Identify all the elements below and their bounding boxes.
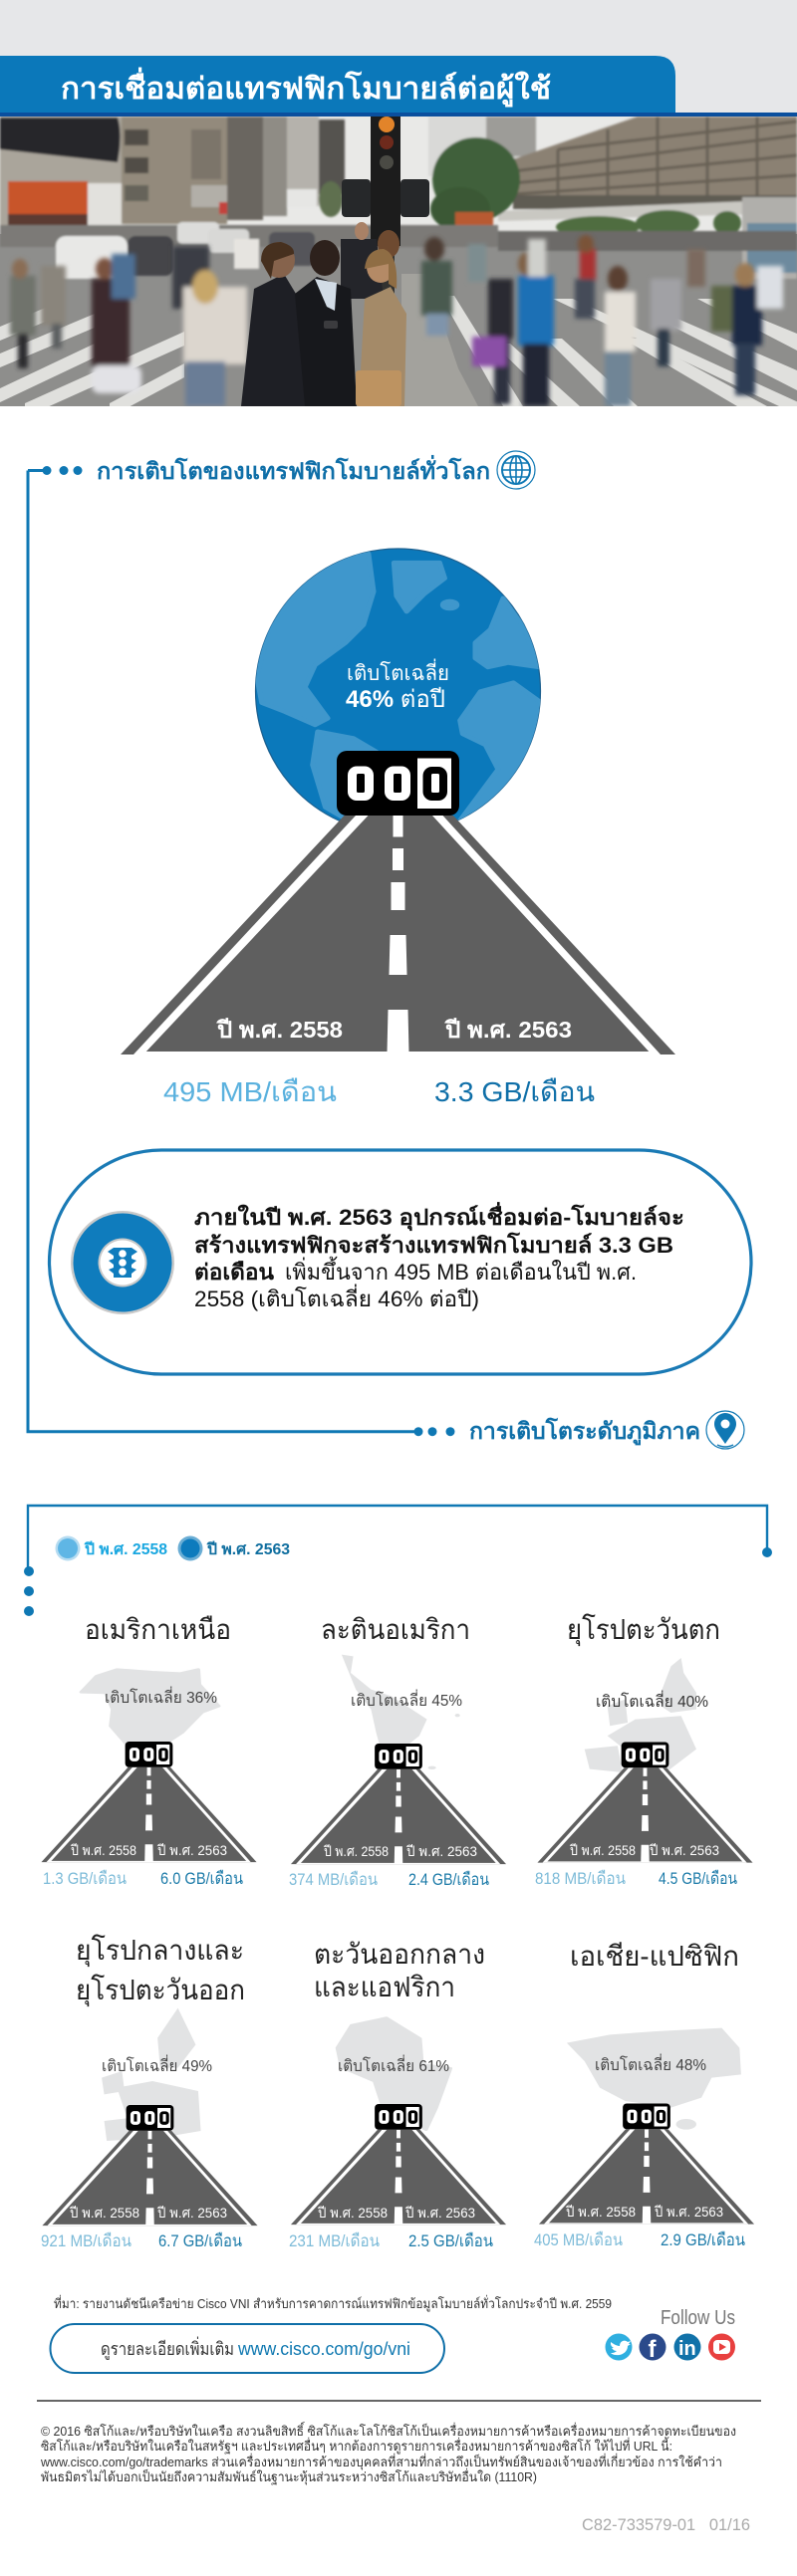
year labels	[70, 2205, 227, 2221]
traffic light pole	[342, 117, 429, 299]
values: 374 MB/เดือน	[289, 1870, 378, 1889]
values: 4.5 GB/เดือน	[659, 1869, 737, 1888]
copyright text: www.cisco.com/go/trademarks ส่วนเครื่องหมายการค้าของบุคคลที่สามที่กล่าวถึงเป็นทรัพย์สินของเจ้าของที่เกี่ยวข้อง การใช้คำว่า	[40, 2453, 722, 2470]
growth rate: เติบโตเฉลี่ย 61%	[338, 2054, 449, 2075]
map: Western Europe	[585, 1658, 696, 1772]
callout text: เพิ่มขึ้นจาก 495 MB ต่อเดือนในปี พ.ศ.	[285, 1257, 637, 1285]
values	[289, 1870, 489, 1889]
map: Africa	[338, 2018, 450, 2130]
road labels	[215, 1017, 572, 1043]
link button	[50, 2324, 444, 2373]
follow us label: Follow Us	[661, 2307, 735, 2329]
road labels: ปี พ.ศ. 2558	[215, 1017, 343, 1043]
year labels: ปี พ.ศ. 2563	[405, 2205, 475, 2221]
value 2020: 3.3 GB: 3.3 GB/เดือน	[434, 1076, 595, 1107]
region: Western Europe	[535, 1613, 753, 1888]
growth rate: เติบโตเฉลี่ย 36%	[105, 1686, 217, 1707]
copyright text	[40, 2422, 736, 2485]
map: Asia	[567, 2028, 741, 2130]
year labels	[318, 2205, 475, 2221]
legend: ปี พ.ศ. 2558	[84, 1540, 167, 1558]
globe with growth rate	[255, 549, 541, 833]
values: 1.3 GB/เดือน	[43, 1869, 127, 1888]
region title	[314, 1939, 485, 2002]
connector dots: regional	[414, 1427, 454, 1436]
road	[41, 1742, 257, 1862]
sidewalk island	[401, 274, 478, 406]
year labels	[566, 2204, 723, 2220]
year labels: ปี พ.ศ. 2563	[157, 1842, 227, 1858]
region title: ละตินอเมริกา	[321, 1614, 470, 1645]
values: 2.9 GB/เดือน	[661, 2230, 745, 2249]
region: Latin America	[289, 1614, 506, 1889]
social icons	[606, 2334, 735, 2363]
road	[537, 1743, 753, 1863]
year labels: ปี พ.ศ. 2558	[70, 2205, 139, 2221]
crosswalk stripes	[0, 296, 797, 417]
growth text: 46% ต่อปี	[346, 686, 445, 713]
year labels: ปี พ.ศ. 2558	[318, 2205, 388, 2221]
region title: ยุโรปตะวันตก	[567, 1613, 720, 1647]
map: Central and Eastern Europe	[102, 2008, 201, 2141]
year labels: ปี พ.ศ. 2563	[406, 1843, 477, 1859]
callout text: ภายในปี พ.ศ. 2563 อุปกรณ์เชื่อมต่อ-โมบายล์จะ	[194, 1201, 684, 1232]
callout text	[194, 1201, 684, 1311]
title: การเชื่อมต่อแทรฟฟิกโมบายล์ต่อผู้ใช้	[61, 67, 551, 108]
top grey band	[0, 0, 797, 113]
section connector line: global	[28, 466, 416, 1432]
values: 818 MB/เดือน	[535, 1869, 626, 1888]
year labels: ปี พ.ศ. 2558	[324, 1843, 389, 1859]
values: 6.7 GB/เดือน	[158, 2231, 242, 2250]
year labels	[71, 1842, 227, 1858]
growth text	[346, 658, 449, 713]
year labels: ปี พ.ศ. 2563	[157, 2205, 227, 2221]
source note: ที่มา: รายงานดัชนีเครือข่าย Cisco VNI สำหรับการคาดการณ์แทรฟฟิกข้อมูลโมบายล์ทั่วโลกประจำปี พ.ศ. 2559	[54, 2295, 612, 2312]
region title: ยุโรปกลางและ	[76, 1934, 244, 1968]
year labels	[570, 1842, 719, 1858]
icon: youtube	[708, 2334, 735, 2360]
callout pill	[50, 1150, 751, 1374]
footer rule	[37, 2400, 761, 2402]
values	[535, 1869, 737, 1888]
region title: อเมริกาเหนือ	[85, 1614, 231, 1645]
growth rate: เติบโตเฉลี่ย 45%	[351, 1689, 462, 1710]
region: North America	[41, 1614, 257, 1888]
callout text: 2558 (เติบโตเฉลี่ย 46% ต่อปี)	[194, 1284, 479, 1311]
region title: ยุโรปตะวันออก	[76, 1974, 245, 2007]
road	[539, 2103, 754, 2225]
icon: traffic light	[71, 1211, 174, 1314]
growth text: เติบโตเฉลี่ย	[347, 658, 449, 685]
icon: globe	[497, 451, 535, 489]
year labels: ปี พ.ศ. 2558	[566, 2204, 636, 2220]
road graphic: global	[121, 751, 675, 1054]
legend	[56, 1535, 290, 1561]
icon: facebook: f	[648, 2336, 658, 2363]
regional section frame	[24, 1506, 772, 1616]
values	[43, 1869, 243, 1888]
road labels: ปี พ.ศ. 2563	[443, 1017, 572, 1043]
legend: ปี พ.ศ. 2563	[206, 1540, 290, 1558]
region title: ตะวันออกกลาง	[314, 1939, 485, 1970]
growth rate: เติบโตเฉลี่ย 40%	[596, 1690, 708, 1711]
road	[291, 1744, 506, 1864]
value 2015: 495 MB: 495 MB/เดือน	[163, 1076, 337, 1107]
values	[534, 2230, 745, 2249]
copyright text: © 2016 ซิสโก้และ/หรือบริษัทในเครือ สงวนลิขสิทธิ์ ซิสโก้และโลโก้ซิสโก้เป็นเครื่องหมายการค้าหรือเครื่องหมายการค้าจดทะเบียนของ	[41, 2422, 736, 2439]
three businesspeople	[241, 222, 406, 406]
values: 921 MB/เดือน	[41, 2231, 132, 2250]
region: Middle East and Africa	[289, 1939, 506, 2250]
year labels: ปี พ.ศ. 2563	[650, 1842, 719, 1858]
blurred pedestrians	[10, 235, 783, 406]
map: Latin America	[342, 1655, 460, 1769]
region: Central and Eastern Europe	[41, 1934, 258, 2250]
year labels: ปี พ.ศ. 2558	[71, 1842, 136, 1858]
link button: ดูรายละเอียดเพิ่มเติม	[101, 2336, 234, 2360]
growth rate: เติบโตเฉลี่ย 49%	[102, 2054, 212, 2075]
values	[41, 2231, 242, 2250]
heading: global mobile traffic growth: การเติบโตของแทรฟฟิกโมบายล์ทั่วโลก	[97, 454, 490, 484]
road	[291, 2104, 506, 2225]
map: North America	[82, 1670, 218, 1746]
icon: map pin	[706, 1411, 744, 1449]
values: 2.5 GB/เดือน	[408, 2231, 493, 2250]
copyright text: ซิสโก้และ/หรือบริษัทในเครือในสหรัฐฯ และประเทศอื่นๆ หากต้องการดูรายการเครื่องหมายการค้าของซิสโก้ ให้ไปที่ URL นี้:	[41, 2437, 672, 2455]
region title: เอเชีย-แปซิฟิก	[570, 1941, 739, 1972]
region title: และแอฟริกา	[314, 1972, 455, 2002]
values: 231 MB/เดือน	[289, 2231, 380, 2250]
year labels: ปี พ.ศ. 2558	[570, 1842, 636, 1858]
icon: twitter	[606, 2334, 632, 2360]
title banner	[0, 56, 797, 117]
link button: www.cisco.com/go/vni	[237, 2339, 410, 2359]
values	[289, 2231, 493, 2250]
year labels	[324, 1843, 477, 1859]
values: 405 MB/เดือน	[534, 2230, 623, 2249]
icon: linkedin: in	[678, 2338, 696, 2360]
heading: regional growth: การเติบโตระดับภูมิภาค	[469, 1417, 700, 1446]
year labels: ปี พ.ศ. 2563	[655, 2204, 723, 2220]
road	[42, 2105, 258, 2225]
photo: crowd crossing city street	[0, 117, 797, 417]
region: Asia Pacific	[534, 1941, 754, 2249]
values: 2.4 GB/เดือน	[408, 1870, 489, 1889]
copyright text: พันธมิตรไม่ได้บอกเป็นนัยถึงความสัมพันธ์ในฐานะหุ้นส่วนระหว่างซิสโก้และบริษัทอื่นใด (1110R)	[41, 2467, 537, 2485]
values: 6.0 GB/เดือน	[160, 1869, 243, 1888]
growth rate: เติบโตเฉลี่ย 48%	[595, 2053, 706, 2074]
region title	[76, 1934, 245, 2007]
document code: C82-733579-01 01/16	[582, 2515, 750, 2534]
callout text: สร้างแทรฟฟิกจะสร้างแทรฟฟิกโมบายล์ 3.3 GB	[194, 1232, 673, 1258]
callout text: ต่อเดือน	[194, 1260, 274, 1285]
